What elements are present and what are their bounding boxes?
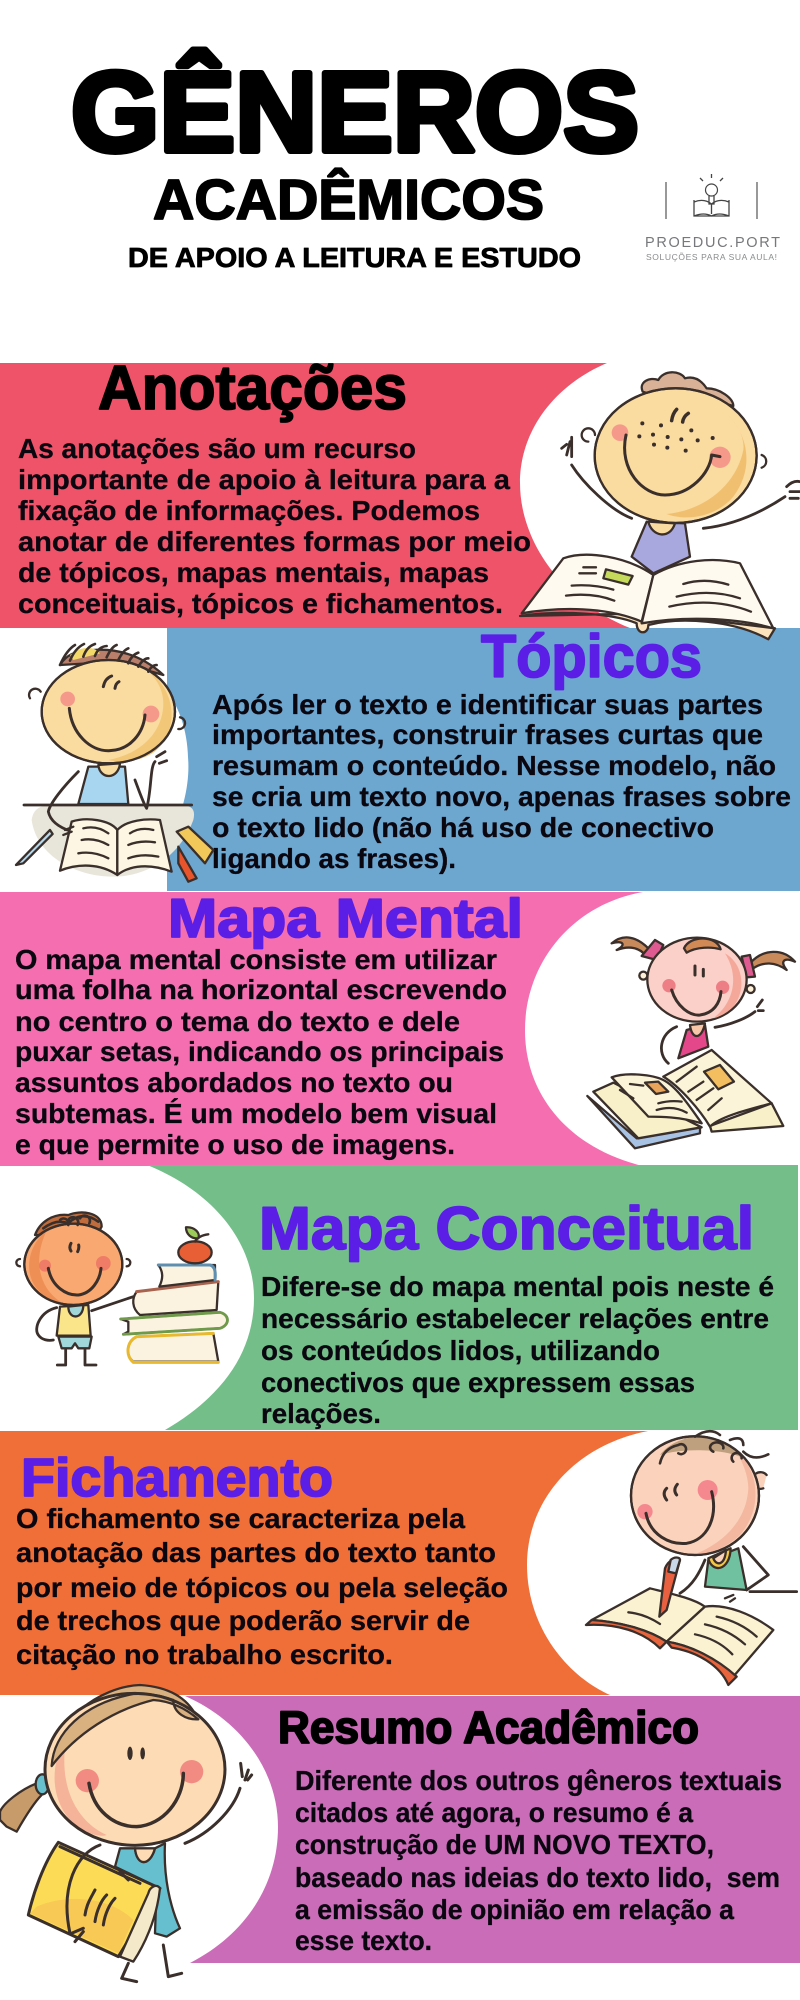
body text: Mapa Conceitual: os conteúdos lidos, utilizando (261, 1335, 660, 1366)
heading: Fichamento: Fichamento (21, 1448, 333, 1508)
illustration: boy beside book stack with apple (16, 1212, 227, 1365)
panel: Tópicos (167, 623, 800, 891)
heading: Tópicos: Tópicos (481, 623, 702, 690)
subtitle: Acadêmicos: ACADÊMICOS (153, 167, 544, 232)
body text: Mapa Conceitual (261, 1271, 774, 1429)
heading: Resumo Acadêmico: Resumo Acadêmico (278, 1702, 699, 1753)
body text: Anotações: fixação de informações. Podemos (18, 495, 480, 526)
heading: Anotações: Anotações (98, 354, 407, 423)
illustration: boy writing in a book (586, 1431, 797, 1685)
body text: Anotações (18, 433, 531, 619)
band: orange (0, 1431, 648, 1695)
body text: Resumo Acadêmico: a emissão de opinião em relação a (295, 1894, 734, 1925)
body text: Fichamento: citação no trabalho escrito. (16, 1639, 393, 1670)
band: purple (185, 1696, 800, 1963)
body text: Tópicos: ligando as frases). (212, 843, 456, 874)
body text: Anotações: de tópicos, mapas mentais, mapas (18, 557, 489, 588)
body text: Mapa Mental: assuntos abordados no texto ou (15, 1067, 453, 1098)
body text: Anotações: As anotações são um recurso (18, 433, 416, 464)
title: Gêneros: GÊNEROS (71, 49, 639, 175)
illustration: boy reading with raised arms (520, 372, 800, 639)
body text: Tópicos: Após ler o texto e identificar suas partes (212, 689, 763, 720)
body text: Tópicos: se cria um texto novo, apenas frases sobre (212, 781, 791, 812)
body text: Resumo Acadêmico: esse texto. (295, 1925, 432, 1956)
body text: Resumo Acadêmico: construção de UM NOVO TEXTO, (295, 1829, 714, 1860)
body text: Mapa Mental: subtemas. É um modelo bem visual (15, 1098, 497, 1129)
body text: Resumo Acadêmico (295, 1765, 782, 1956)
body text: Mapa Conceitual: relações. (261, 1398, 381, 1429)
body text: Fichamento: por meio de tópicos ou pela seleção (16, 1572, 508, 1603)
panel: Mapa Mental (0, 887, 643, 1166)
logo name: PROEDUC.PORT (645, 235, 780, 251)
heading: Mapa Mental: Mapa Mental (168, 887, 523, 949)
body text: Tópicos: o texto lido (não há uso de conectivo (212, 812, 714, 843)
body text: Resumo Acadêmico: baseado nas ideias do texto lido, sem (295, 1862, 780, 1893)
subtitle: de apoio: DE APOIO A LEITURA E ESTUDO (128, 242, 581, 273)
body text: Mapa Mental (15, 944, 507, 1160)
logo tagline: SOLUÇÕES PARA SUA AULA! (646, 252, 777, 262)
illustration: girl carrying a yellow book (0, 1685, 252, 1982)
logo: Proeduc.Port (645, 174, 780, 262)
body text: Tópicos: importantes, construir frases curtas que (212, 719, 763, 750)
body text: Fichamento: O fichamento se caracteriza pela (16, 1503, 465, 1534)
body text: Anotações: anotar de diferentes formas por meio (18, 526, 531, 557)
band: red (0, 363, 630, 628)
body text: Mapa Mental: O mapa mental consiste em utilizar (15, 944, 497, 975)
body text: Mapa Conceitual: Difere-se do mapa mental pois neste é (261, 1271, 774, 1302)
panel: Fichamento (0, 1431, 648, 1695)
body text: Mapa Mental: puxar setas, indicando os principais (15, 1036, 504, 1067)
body text: Mapa Mental: uma folha na horizontal escrevendo (15, 974, 507, 1005)
body text: Mapa Mental: no centro o tema do texto e dele (15, 1006, 460, 1037)
body text: Mapa Mental: e que permite o uso de imagens. (15, 1129, 455, 1160)
illustration: girl with pigtails and open book (587, 937, 795, 1148)
band: blue (167, 628, 800, 891)
body text: Fichamento (16, 1503, 508, 1670)
body text: Mapa Conceitual: necessário estabelecer relações entre (261, 1303, 769, 1334)
body text: Fichamento: anotação das partes do texto tanto (16, 1537, 496, 1568)
panel: Mapa Conceitual (147, 1165, 798, 1430)
body text: Resumo Acadêmico: Diferente dos outros gêneros textuais (295, 1765, 782, 1796)
panel: Resumo Acadêmico (185, 1696, 800, 1963)
body text: Anotações: conceituais, tópicos e fichamentos. (18, 588, 503, 619)
body text: Anotações: importante de apoio à leitura para a (18, 464, 510, 495)
illustration: boy studying at desk (16, 644, 213, 882)
band: pink (0, 892, 643, 1166)
band: green (147, 1165, 798, 1430)
header title (71, 49, 639, 273)
body text: Tópicos: resumam o conteúdo. Nesse modelo, não (212, 750, 776, 781)
body text: Fichamento: de trechos que poderão servir de (16, 1605, 470, 1636)
body text: Mapa Conceitual: conectivos que expressem essas (261, 1367, 695, 1398)
heading: Mapa Conceitual: Mapa Conceitual (259, 1195, 754, 1262)
body text: Resumo Acadêmico: citados até agora, o resumo é a (295, 1797, 693, 1828)
body text: Tópicos (212, 689, 791, 874)
panel: Anotações (0, 354, 630, 628)
logo icon: book and lamp (666, 174, 757, 219)
